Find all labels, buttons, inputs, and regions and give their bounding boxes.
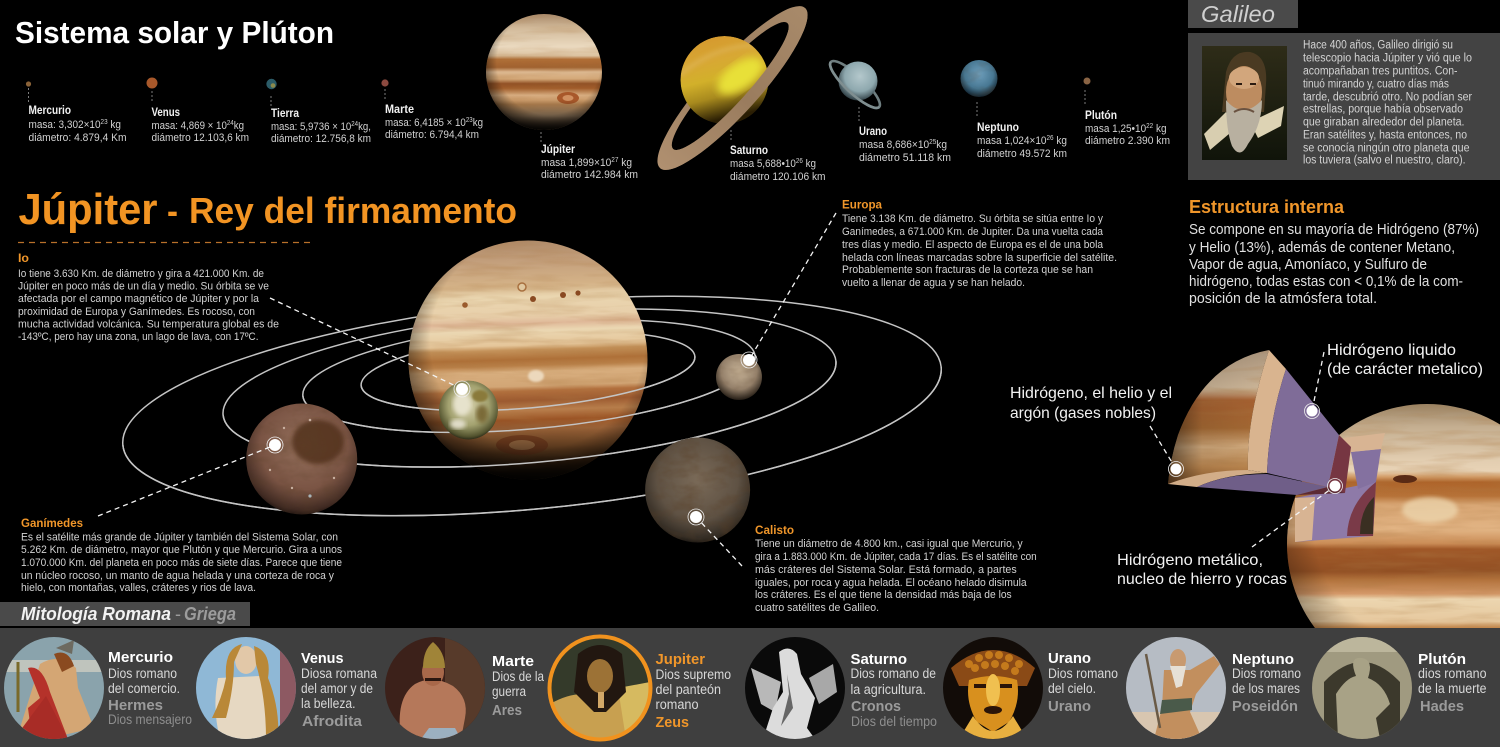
planet row: Tierra	[266, 79, 371, 145]
Galileo tab heading	[1188, 0, 1298, 28]
planet row: Venus: diámetro 12.103,6 km	[152, 132, 249, 144]
planet row: Urano: diámetro 51.118 km	[859, 152, 951, 164]
planet row: Júpiter	[486, 14, 638, 181]
icon: Plutón engraving	[1312, 637, 1412, 739]
god: Saturno: Saturno	[850, 651, 907, 668]
icon: Galileo portrait	[1202, 46, 1287, 160]
planet row: Tierra: diámetro: 12.756,8 km	[271, 133, 371, 145]
god: Saturno: Dios romano de	[850, 666, 936, 681]
god: Neptuno: Dios romano	[1232, 666, 1301, 681]
text block: Estructura interna: hidrógeno, todas estas con < 0,1% de la com-	[1189, 273, 1463, 290]
text block: Io: Júpiter en poco más de un día y medio. Su órbita se ve	[18, 280, 269, 292]
orbits in front of Jupiter	[123, 356, 951, 548]
god: Mercurio: Dios mensajero	[108, 712, 192, 727]
heading: Júpiter - Rey del firmamento: -	[167, 190, 178, 231]
planet row: Urano: masa 8,686×10	[859, 139, 935, 151]
planet row: Neptuno: diámetro 49.572 km	[977, 148, 1067, 160]
god: Júpiter (highlighted): romano	[656, 697, 698, 712]
planet row: Plutón: masa 1,25•10	[1085, 123, 1152, 135]
planet row: Mercurio: Mercurio	[28, 105, 71, 117]
god: Mercurio: Dios romano	[108, 666, 177, 681]
planet row: Venus: 24	[227, 120, 234, 127]
god: Neptuno: Poseidón	[1232, 698, 1298, 715]
text block: Estructura interna: posición de la atmósfera total.	[1189, 290, 1377, 307]
planet row: Plutón: diámetro 2.390 km	[1085, 135, 1170, 147]
god: Venus: Venus	[301, 650, 344, 667]
leader: Calisto	[688, 509, 742, 566]
panel: Galileo	[1188, 0, 1500, 180]
planet row: Neptuno: kg	[1054, 135, 1067, 147]
text block: Calisto: cuatro satélites de Galileo.	[755, 602, 879, 614]
heading tab: Mitología Romana - Griega: Griega	[184, 604, 236, 624]
god: Marte: Ares	[492, 702, 522, 719]
moon: Io	[439, 380, 498, 440]
planet row: Plutón: kg	[1153, 123, 1166, 135]
icon: Urano mask	[943, 637, 1043, 739]
planet row: Neptuno: masa 1,024×10	[977, 135, 1053, 147]
label: hidrógeno metálico	[1117, 552, 1287, 588]
planet row: Saturno: masa 5,688•10	[730, 158, 804, 170]
text block: Europa: Probablemente son fracturas de la corteza que se han	[842, 264, 1093, 276]
text block: Ganímedes	[21, 516, 342, 594]
planet row: Plutón: Plutón	[1085, 110, 1117, 122]
heading: Júpiter - Rey del firmamento: Júpiter	[18, 185, 158, 234]
god: Plutón: dios romano	[1418, 666, 1486, 681]
god: Júpiter (highlighted): del panteón	[656, 682, 721, 697]
god: Júpiter (highlighted): Jupiter	[656, 651, 705, 668]
planet row: Júpiter: kg	[618, 157, 632, 169]
Galileo text: los tuviera (salvo el nuestro, claro).	[1303, 154, 1466, 166]
god: Saturno	[745, 637, 937, 739]
text block: Estructura interna: Estructura interna	[1189, 197, 1345, 217]
cutaway: wedge layers	[1168, 350, 1351, 495]
icon: Saturno statue	[745, 637, 845, 739]
label: hidrógeno líquido: (de carácter metalico)	[1327, 361, 1483, 378]
text block: Ganímedes: hielo, con montañas, valles, cráteres y rios de lava.	[21, 582, 256, 594]
planet row: Saturno: Saturno	[730, 145, 768, 157]
text block: Io: mucha actividad volcánica. Su temperatura global es de	[18, 318, 279, 330]
god: Mercurio: Hermes	[108, 697, 163, 714]
orbits behind Jupiter	[113, 264, 951, 548]
planet row: Saturno: 26	[796, 158, 803, 165]
icon: Mercurio painting	[4, 637, 104, 739]
heading: Júpiter - Rey del firmamento: Rey del firmamento	[189, 190, 517, 231]
text block: Estructura interna	[1189, 197, 1479, 307]
leader: liquid hydrogen	[1304, 352, 1324, 418]
god: Marte: guerra	[492, 684, 526, 699]
god: Plutón: de la muerte	[1418, 681, 1486, 696]
text block: Calisto: los cráteres. Es el que tiene la densidad más baja de los	[755, 589, 1012, 601]
god: Júpiter (highlighted)	[550, 636, 731, 740]
god: Saturno: Dios del tiempo	[851, 714, 937, 729]
planet row: Venus: Venus	[152, 107, 180, 119]
god: Mercurio: del comercio.	[108, 681, 180, 696]
chart: Jupiter and its orbiting moons	[98, 213, 951, 566]
icon: Venus painting	[196, 637, 296, 739]
text block: Estructura interna: Vapor de agua, Amoníaco, y Sulfuro de	[1189, 256, 1427, 273]
planet row: Tierra: kg,	[358, 121, 371, 133]
god: Júpiter (highlighted): Dios supremo	[656, 667, 731, 682]
god: Venus: la belleza.	[301, 696, 356, 711]
Galileo text: Hace 400 años, Galileo dirigió su	[1303, 40, 1453, 52]
planet row: Mercurio: masa: 3,302×10	[28, 119, 108, 131]
planet row: Marte: 23	[466, 117, 473, 124]
planet row: Neptuno	[960, 60, 1067, 160]
god: Neptuno: Neptuno	[1232, 651, 1294, 668]
planet row: Marte: kg	[473, 117, 483, 129]
god: Marte: Dios de la	[492, 669, 544, 684]
heading tab: Mitología Romana - Griega: Mitología Romana	[21, 604, 171, 624]
god: Saturno: Cronos	[851, 698, 901, 715]
text block: Europa	[842, 198, 1117, 289]
label: gases nobles	[1010, 385, 1172, 422]
text block: Io: proximidad de Europa y Ganímedes. Es rocoso, con	[18, 306, 255, 318]
planet row: Urano	[825, 55, 951, 164]
text block: Io: afectada por el campo magnético de Júpiter y por la	[18, 293, 260, 305]
god: Júpiter (highlighted): Zeus	[656, 714, 689, 731]
god: Mercurio	[4, 637, 192, 739]
Galileo text: tarde, descubrió otro. No podían ser	[1303, 92, 1472, 104]
icon: Neptuno painting	[1126, 637, 1226, 739]
god: Venus: Diosa romana	[301, 666, 377, 681]
planet row: Neptuno: 26	[1046, 135, 1054, 142]
planet row: Venus: masa: 4,869 × 10	[152, 120, 237, 132]
Galileo text: telescopio hacia Júpiter y vió que lo	[1303, 52, 1472, 64]
text block: Calisto: más cráteres del Sistema Solar. Está formado, a partes	[755, 564, 1017, 576]
Galileo text: acompañaban tres puntitos. Con-	[1303, 66, 1458, 78]
planet row: Tierra: Tierra	[271, 108, 300, 120]
heading tab: Mitología Romana - Griega: -	[175, 604, 181, 624]
planet row: Júpiter: diámetro 142.984 km	[541, 169, 638, 181]
Galileo text: que giraban alrededor del planeta.	[1303, 116, 1464, 128]
planet row: Marte: diámetro: 6.794,4 km	[385, 129, 479, 141]
Galileo text: estrellas, porque había observado	[1303, 104, 1463, 116]
diagram: internal structure of Jupiter	[1010, 344, 1500, 628]
planet row: Plutón	[1084, 78, 1170, 147]
text block: Ganímedes: Ganímedes	[21, 516, 83, 530]
moon: Europa	[716, 354, 762, 400]
text block: Io: Io	[18, 251, 29, 265]
god: Urano: Urano	[1048, 650, 1091, 667]
panel: mythology bar	[0, 628, 1500, 747]
planet row: Urano: Urano	[859, 126, 887, 138]
planet row: Marte: Marte	[385, 104, 414, 116]
label: gases nobles: argón (gases nobles)	[1010, 405, 1156, 422]
icon: Júpiter painting	[550, 636, 650, 740]
heading: Júpiter - Rey del firmamento	[18, 185, 517, 242]
Galileo tab heading: Galileo	[1201, 1, 1275, 27]
text block: Estructura interna: y Helio (13%), además de contener Metano,	[1189, 239, 1455, 256]
icon: Marte painting	[385, 637, 485, 739]
god: Mercurio: Mercurio	[108, 649, 173, 666]
planet: large Jupiter	[1287, 404, 1500, 628]
cutaway: lower wedge	[1295, 433, 1385, 542]
moon: Calisto	[645, 438, 750, 542]
leader: metallic hydrogen	[1252, 478, 1342, 547]
Galileo text	[1303, 40, 1472, 166]
god: Urano	[943, 637, 1118, 739]
text block: Io	[18, 251, 279, 343]
text block: Europa: vuelto a llenar de agua y se han helado.	[842, 277, 1025, 289]
leader: Europa	[741, 213, 836, 368]
text block: Europa: helada con líneas marcadas sobre la superficie del satélite.	[842, 252, 1117, 264]
label: hidrógeno líquido: Hidrógeno liquido	[1327, 342, 1456, 359]
planet row: Saturno: kg	[803, 158, 816, 170]
planet row: Tierra: 24	[351, 121, 358, 128]
text block: Ganímedes: un núcleo rocoso, un manto de agua helada y una corteza de roca y	[21, 570, 334, 582]
god: Plutón: Hades	[1420, 698, 1464, 715]
god: Plutón	[1312, 637, 1486, 739]
planet: main Jupiter	[408, 240, 648, 481]
god: Urano: Urano	[1048, 698, 1091, 715]
planet row: Marte: masa: 6,4185 × 10	[385, 117, 476, 129]
text block: Ganímedes: 1.070.000 Km. del planeta en poco más de siete días. Parece que tiene	[21, 557, 342, 569]
title: Sistema solar y Plúton	[15, 16, 334, 50]
god: Venus: del amor y de	[301, 681, 373, 696]
text block: Europa: Tiene 3.138 Km. de diámetro. Su órbita se sitúa entre Io y	[842, 213, 1103, 225]
planet row: Mercurio	[26, 81, 126, 144]
text block: Calisto: Calisto	[755, 523, 794, 537]
planet row: Urano: 25	[929, 139, 936, 146]
Galileo text: Eran satélites y, hasta entonces, no	[1303, 130, 1467, 142]
planet row: Venus: kg	[234, 120, 244, 132]
text block: Io: -143ºC, pero hay una zona, un lago de lava, con 17ºC.	[18, 331, 258, 343]
text block: Io: Io tiene 3.630 Km. de diámetro y gira a 421.000 Km. de	[18, 268, 264, 280]
label: hidrógeno metálico: Hidrógeno metálico,	[1117, 552, 1263, 569]
leader: Io	[270, 298, 470, 397]
planet row: Plutón: 22	[1146, 123, 1153, 130]
god: Plutón: Plutón	[1418, 651, 1466, 668]
text block: Europa: tres días y medio. El aspecto de Europa es el de una bola	[842, 239, 1104, 251]
planet row: Tierra: masa: 5,9736 × 10	[271, 121, 362, 133]
god: Neptuno	[1126, 637, 1301, 739]
planet row: Júpiter: Júpiter	[541, 144, 575, 156]
planet row: Mercurio: kg	[108, 119, 121, 131]
label: hidrógeno metálico: nucleo de hierro y rocas	[1117, 571, 1287, 588]
god: Marte: Marte	[492, 653, 534, 670]
cutaway: upper wedge surface	[1165, 348, 1271, 486]
planet row: Mercurio: diámetro: 4.879,4 Km	[28, 132, 126, 144]
text block: Ganímedes: Es el satélite más grande de Júpiter y también del Sistema Solar, con	[21, 532, 338, 544]
text block: Europa: Europa	[842, 198, 882, 212]
planet row: Júpiter: 27	[611, 157, 619, 164]
text block: Ganímedes: 5.262 Km. de diámetro, mayor que Plutón y que Mercurio. Gira a unos	[21, 544, 342, 556]
god: Marte	[385, 637, 544, 739]
Galileo text: tinuó mirando y, cuatro días más	[1303, 78, 1449, 90]
heading tab: Mitología Romana - Griega	[0, 602, 250, 626]
god: Neptuno: de los mares	[1232, 681, 1300, 696]
text block: Calisto	[755, 523, 1037, 614]
god: Venus	[196, 637, 377, 739]
planet row: Urano: kg	[936, 139, 947, 151]
god: Venus: Afrodita	[302, 713, 363, 730]
god: Urano: del cielo.	[1048, 681, 1096, 696]
leader: Ganímedes	[98, 437, 283, 516]
planet row: Júpiter: masa 1,899×10	[541, 157, 617, 169]
planet row: Saturno	[657, 6, 825, 180]
text block: Europa: Ganímedes, a 671.000 Km. de Jupiter. Da una vuelta cada	[842, 226, 1104, 238]
god: Saturno: la agricultura.	[850, 682, 926, 697]
text block: Calisto: gira a 1.883.000 Km. de Júpiter, cada 17 días. Es el satélite con	[755, 551, 1037, 563]
Galileo text: se conocía ningún otro planeta que	[1303, 142, 1470, 154]
moon: Ganímedes	[246, 404, 357, 514]
planet row: Venus	[146, 78, 249, 144]
label: gases nobles: Hidrógeno, el helio y el	[1010, 385, 1172, 402]
planet row: Mercurio: 23	[101, 119, 108, 126]
label: hidrógeno líquido	[1327, 342, 1483, 378]
god: Urano: Dios romano	[1048, 666, 1118, 681]
planet row: Neptuno: Neptuno	[977, 122, 1019, 134]
text block: Calisto: iguales, por roca y agua helada. El océano helado disimula	[755, 577, 1028, 589]
planet row: Saturno: diámetro 120.106 km	[730, 171, 826, 183]
text block: Calisto: Tiene un diámetro de 4.800 km., casi igual que Mercurio, y	[755, 538, 1023, 550]
planet row: Marte	[381, 79, 483, 141]
leader: gases	[1150, 426, 1184, 476]
